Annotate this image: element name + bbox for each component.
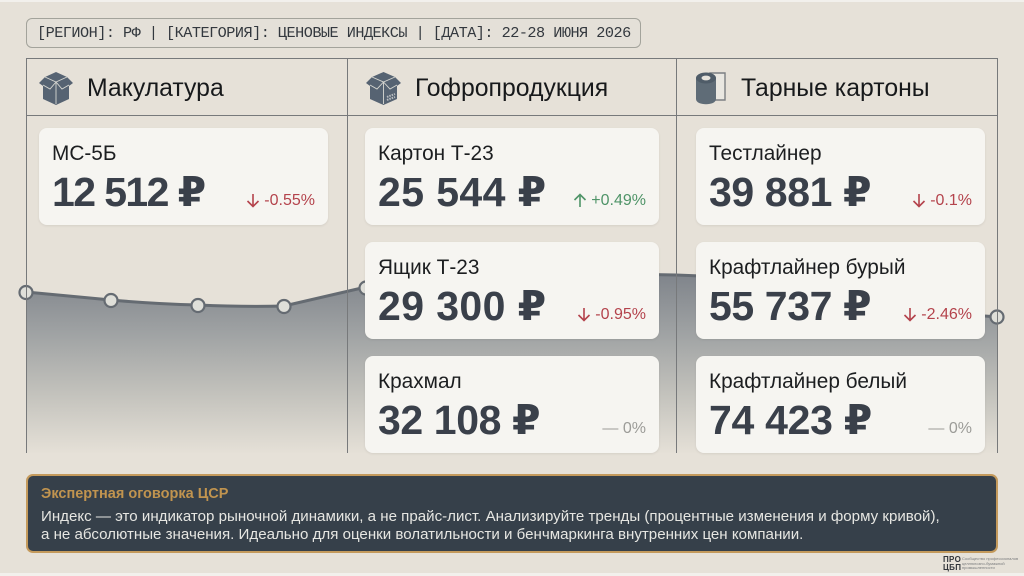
card: Тестлайнер: 39 881 ₽ (709, 169, 871, 215)
card: Тестлайнер: -0.1% (930, 192, 972, 209)
logo: ПРО ЦБП: целлюлозно-бумажной (962, 561, 1005, 566)
heading: Гофропродукция: Гофропродукция (415, 75, 608, 102)
card: Крафтлайнер бурый: Крафтлайнер бурый (709, 256, 905, 279)
callout body (41, 508, 940, 543)
card: Крахмал: Крахмал (378, 370, 462, 393)
card: Крафтлайнер бурый: -2.46% (921, 306, 972, 323)
card: Крафтлайнер белый: — 0% (928, 420, 972, 437)
card: Крахмал: — 0% (602, 420, 646, 437)
card: Картон Т-23: +0.49% (591, 192, 646, 209)
card: Крахмал (365, 356, 659, 453)
callout body: а не абсолютные значения. Идеально для оценки волатильности и бенчмаркинга внутренних цен компании. (41, 526, 803, 543)
card: Картон Т-23: Картон Т-23 (378, 142, 494, 165)
logo: ПРО ЦБП: Сообщество профессионалов (962, 556, 1018, 561)
card: Крахмал: 32 108 ₽ (378, 397, 540, 443)
card: Картон Т-23 (365, 128, 659, 225)
logo: ПРО ЦБП: ЦБП (943, 563, 961, 572)
card: Тестлайнер: Тестлайнер (709, 142, 822, 165)
card: Ящик Т-23: -0.95% (595, 306, 646, 323)
callout title: Экспертная оговорка ЦСР (41, 486, 228, 502)
card: Картон Т-23: 25 544 ₽ (378, 169, 547, 215)
card: Ящик Т-23: Ящик Т-23 (378, 256, 479, 279)
heading: Макулатура: Макулатура (87, 75, 224, 102)
card: Крафтлайнер белый: 74 423 ₽ (709, 397, 872, 443)
icon: open box (39, 72, 73, 105)
card: Ящик Т-23: 29 300 ₽ (378, 283, 547, 329)
callout: expert disclaimer (26, 474, 998, 553)
card: Ящик Т-23 (365, 242, 659, 339)
card: МС-5Б: 12 512 ₽ (52, 169, 205, 215)
icon: corrugated box (366, 72, 401, 105)
heading: Тарные картоны: Тарные картоны (741, 75, 930, 102)
card: МС-5Б: -0.55% (264, 192, 315, 209)
card: Крафтлайнер белый: Крафтлайнер белый (709, 370, 907, 393)
callout body: Индекс — это индикатор рыночной динамики, а не прайс-лист. Анализируйте тренды (процентные изменения и форму кривой), (41, 508, 940, 525)
meta tag strip (26, 18, 641, 48)
logo: ПРО ЦБП (943, 555, 1018, 572)
card: Крафтлайнер бурый: 55 737 ₽ (709, 283, 871, 329)
card: Крафтлайнер бурый (696, 242, 985, 339)
meta tag strip: [РЕГИОН]: РФ | [КАТЕГОРИЯ]: ЦЕНОВЫЕ ИНДЕКСЫ | [ДАТА]: 22-28 ИЮНЯ 2026 (37, 24, 631, 42)
logo: ПРО ЦБП: промышленности (962, 565, 995, 570)
card: Тестлайнер (696, 128, 985, 225)
card: МС-5Б: МС-5Б (52, 142, 116, 165)
card: МС-5Б (39, 128, 328, 225)
icon: paper roll (696, 72, 726, 104)
card: Крафтлайнер белый (696, 356, 985, 453)
logo: ПРО ЦБП: ПРО (943, 555, 961, 564)
